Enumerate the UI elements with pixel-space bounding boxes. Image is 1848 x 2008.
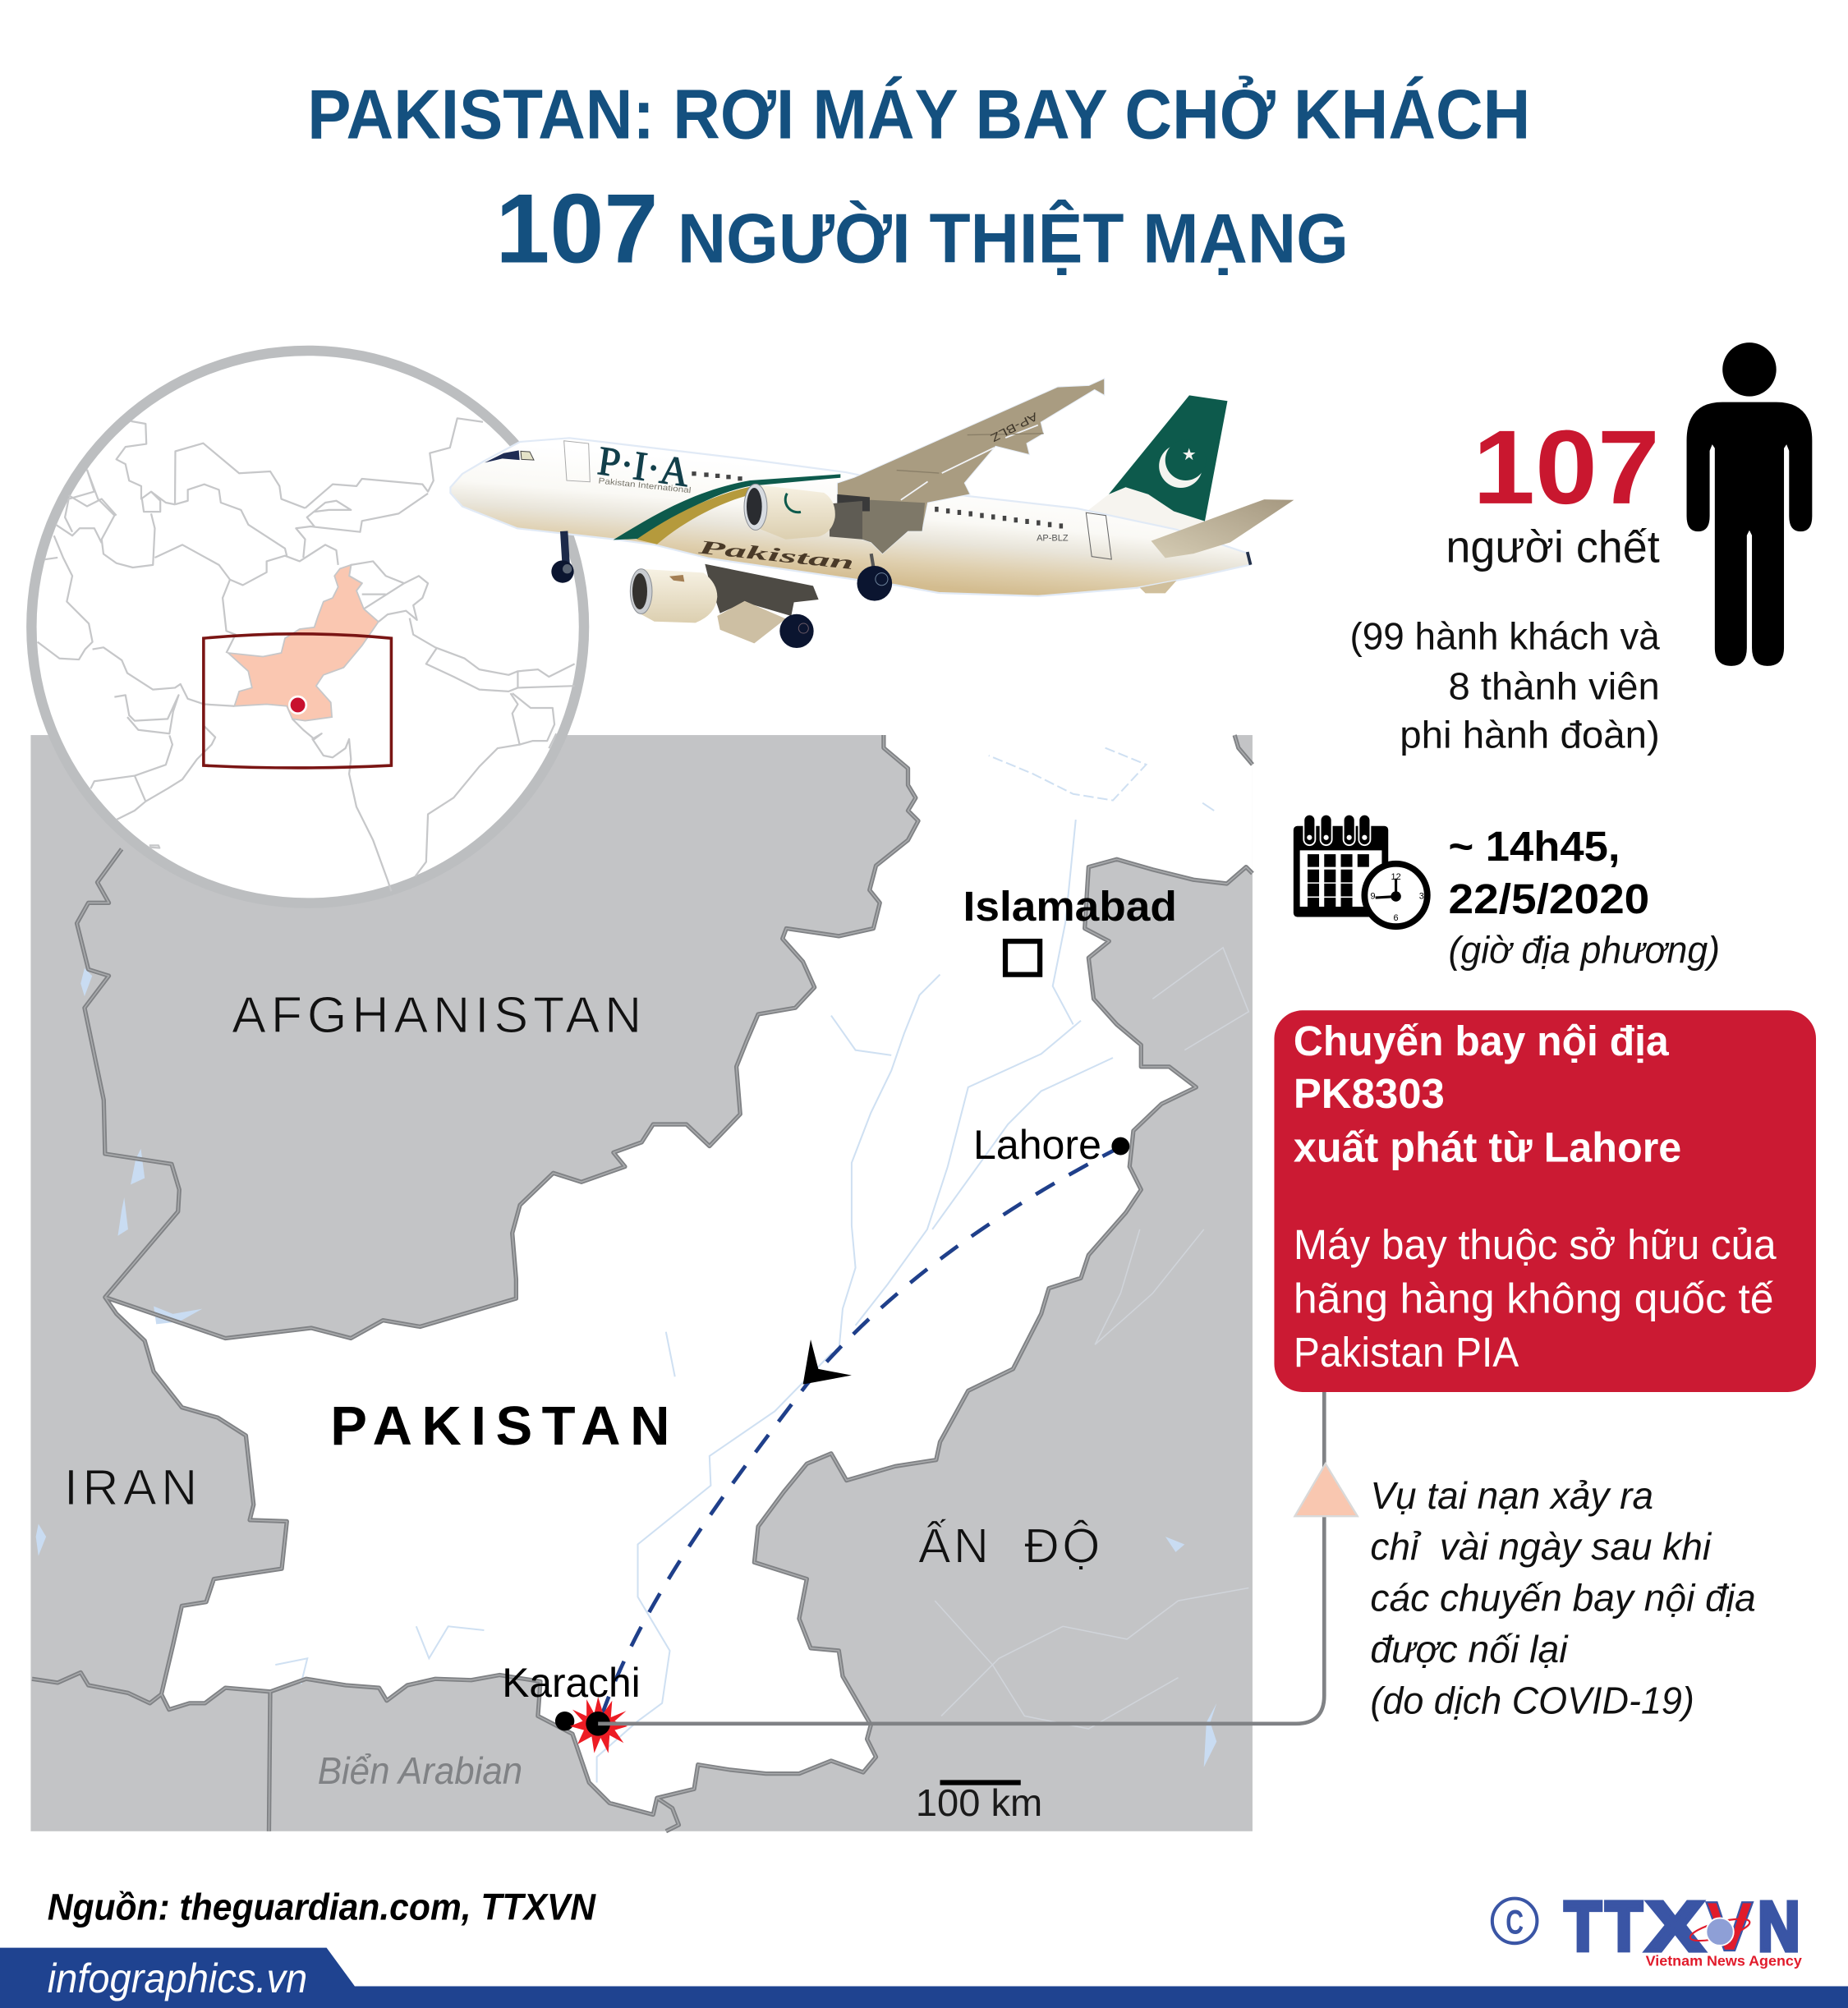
panel: flight info: Pakistan PIA [1294, 1328, 1519, 1376]
rear windows and door: AP-BLZ [1037, 534, 1069, 544]
icon: crash starburst [570, 1697, 627, 1753]
nose gear [551, 531, 574, 583]
icon: person [1687, 342, 1812, 666]
footer bar: infographics.vn [48, 1955, 307, 2001]
icon: warning triangle [1294, 1463, 1358, 1516]
panel: flight info: xuất phát từ Lahore [1294, 1123, 1681, 1170]
engine lower [630, 569, 717, 623]
stat: death toll: 8 thành viên [1449, 664, 1660, 707]
main wheel upper [857, 554, 892, 601]
cheatline stripe [614, 474, 840, 540]
note: accident context: các chuyến bay nội địa [1370, 1577, 1756, 1620]
landing gear and engines [551, 484, 862, 648]
source: Nguồn: theguardian.com, TTXVN [48, 1886, 596, 1928]
front windows [692, 471, 742, 480]
logo: TTXVN: N [1758, 1887, 1800, 1966]
logo: TTXVN: T [1606, 1887, 1643, 1966]
note: accident context: (do dịch COVID-19) [1370, 1679, 1694, 1721]
flight path dashed line [600, 1146, 1122, 1722]
main wing: AP-BLZ [989, 410, 1040, 444]
stat: death toll [1349, 409, 1661, 756]
tail cone cap [1248, 552, 1251, 565]
rivers [275, 748, 1214, 1783]
Karachi marker on inset [289, 696, 306, 714]
rear windows and door [935, 507, 1177, 593]
connector line from panel to crash site [598, 1392, 1324, 1724]
country borders [32, 735, 1253, 1831]
title: PAKISTAN: RƠI MÁY BAY CHỞ KHÁCH [307, 75, 1530, 154]
cockpit windows [485, 450, 520, 462]
stat: death toll: (99 hành khách và [1349, 615, 1661, 658]
inset locator globe [31, 351, 584, 903]
inset map frame [204, 634, 391, 768]
icon: calendar and clock: 9 [1370, 892, 1376, 902]
scale bar: 100 km [916, 1781, 1042, 1824]
marker: Karachi dot [555, 1712, 574, 1730]
forward fuselage details [485, 437, 855, 574]
label: Islamabad: Islamabad [963, 882, 1177, 930]
aircraft name: Pakistan [696, 536, 855, 574]
icon: calendar and clock: 3 [1419, 892, 1424, 902]
label: Iran: IRAN [64, 1459, 197, 1515]
label: Lahore: Lahore [973, 1122, 1101, 1168]
title: NGƯỜI THIỆT MẠNG [678, 200, 1349, 278]
logo: TTXVN: C [1506, 1903, 1524, 1941]
front door [564, 441, 590, 482]
logo: TTXVN [1492, 1887, 1802, 1969]
logo: TTXVN: Vietnam News Agency [1646, 1952, 1802, 1969]
main wheel lower [779, 614, 814, 648]
panel: flight info: hãng hàng không quốc tế [1294, 1274, 1774, 1321]
label: Afghanistan: AFGHANISTAN [232, 987, 641, 1044]
stat: death toll: phi hành đoàn) [1400, 714, 1660, 756]
main wing [837, 379, 1105, 554]
fuselage [450, 438, 1250, 596]
label: Pakistan: PAKISTAN [330, 1395, 669, 1457]
marker: Islamabad square [1005, 941, 1040, 975]
engine upper [744, 484, 862, 540]
note: accident context: chỉ vài ngày sau khi [1370, 1525, 1712, 1568]
panel: flight info [1274, 1010, 1816, 1392]
logo PIA: P·I·A [595, 437, 692, 495]
tail fin: ★ [1182, 446, 1197, 464]
Pakistan on inset [228, 565, 379, 721]
date and time: 22/5/2020 [1449, 875, 1649, 922]
icon: calendar and clock: 6 [1394, 913, 1399, 923]
label: India: ẤN ĐỘ [918, 1518, 1100, 1573]
date and time: (giờ địa phương) [1449, 929, 1720, 972]
footer bar [0, 1948, 1848, 2008]
date and time: ~ 14h45, [1449, 822, 1620, 870]
icon: direction arrowhead [803, 1339, 852, 1385]
title [307, 75, 1530, 284]
tail fin [1083, 395, 1227, 534]
logo: TTXVN: V [1706, 1887, 1754, 1966]
icon: calendar and clock [1294, 815, 1427, 926]
note: accident context [1370, 1474, 1756, 1721]
horizontal stabilizer [1152, 499, 1294, 558]
panel: flight info: Chuyến bay nội địa [1294, 1017, 1669, 1064]
panel: flight info: Máy bay thuộc sở hữu của [1294, 1220, 1777, 1268]
marker: Lahore dot [1111, 1137, 1129, 1155]
date and time [1449, 822, 1720, 972]
label: Karachi: Karachi [502, 1660, 641, 1706]
panel: flight info: PK8303 [1294, 1069, 1445, 1117]
lakes and rivers on grey land [36, 968, 1216, 1767]
logo: TTXVN: T [1565, 1887, 1602, 1966]
airline small text: Pakistan International [598, 476, 692, 495]
logo: TTXVN: X [1646, 1887, 1704, 1966]
map of Pakistan and neighbours [30, 735, 1253, 1831]
illustration: PIA aircraft [450, 379, 1294, 648]
title: 107 [495, 174, 658, 284]
stat: death toll: người chết [1446, 522, 1660, 572]
note: accident context: được nối lại [1370, 1628, 1569, 1670]
icon: calendar and clock: 12 [1391, 872, 1401, 882]
stat: death toll: 107 [1473, 409, 1660, 526]
label: Arabian Sea: Biển Arabian [318, 1749, 522, 1792]
note: accident context: Vụ tai nạn xảy ra [1370, 1474, 1653, 1517]
pylon and flap lower [705, 564, 819, 643]
